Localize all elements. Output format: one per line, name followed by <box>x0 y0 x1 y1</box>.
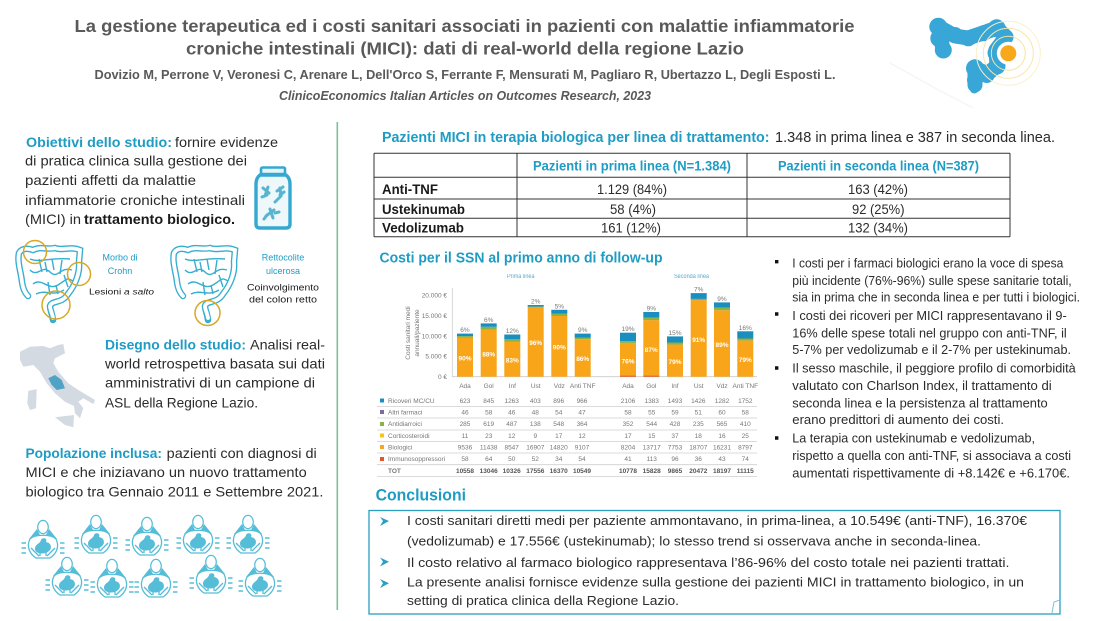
panel: study design: world retrospettiva basata sui dati <box>104 356 325 372</box>
data table: cost breakdown: 565 <box>717 421 728 428</box>
data table: cost breakdown: 7753 <box>668 444 683 452</box>
data table: cost breakdown: 58 <box>485 410 493 416</box>
panel: ulcerative colitis: Coinvolgimento <box>247 283 319 293</box>
authors: Dovizio M, Perrone V, Veronesi C, Arenare L, Dell'Orco S, Ferrante F, Mensurati M, Pagliaro R, Ubertazzo L, Degli Esposti L. <box>94 67 836 82</box>
bar chart: annual costs per patient: 96% <box>529 340 542 347</box>
table: patients by biologic and line: Pazienti in prima linea (N=1.384) <box>533 159 731 174</box>
data table: cost breakdown: 58 <box>461 456 469 463</box>
data table: cost breakdown: 623 <box>460 398 471 405</box>
data table: cost breakdown: 17556 <box>526 468 545 475</box>
data table: cost breakdown: 428 <box>670 421 681 428</box>
panel: study design: amministrativi di un campione di <box>105 374 315 390</box>
data table: cost breakdown: 16 <box>718 433 726 440</box>
data table: cost breakdown: 46 <box>508 410 516 416</box>
icon: intestine with skip lesions <box>18 240 90 320</box>
panel: study design: Analisi real- <box>250 336 325 352</box>
data table: cost breakdown: 352 <box>623 421 634 428</box>
data table: cost breakdown: 13717 <box>643 444 661 452</box>
data table: cost breakdown: Biologici <box>388 444 412 452</box>
heading: patients by treatment line <box>382 130 1055 146</box>
panel: ulcerative colitis: ulcerosa <box>266 266 300 276</box>
data table: cost breakdown: 548 <box>553 421 565 428</box>
panel: included population: MICI e che iniziavano un nuovo trattamento <box>26 464 307 480</box>
bar chart: annual costs per patient: 10.000 € <box>422 333 447 340</box>
table: patients by biologic and line: 92 (25%) <box>852 202 904 217</box>
panel: conclusions: (vedolizumab) e 17.556€ (ustekinumab); lo stesso trend si osservava anche in seconda-linea. <box>407 534 981 549</box>
data table: cost breakdown: Altri farmaci <box>388 410 422 416</box>
data table: cost breakdown: 54 <box>578 456 586 463</box>
panel: study design: Disegno dello studio: <box>105 336 246 352</box>
data table: cost breakdown: 50 <box>508 456 516 463</box>
table: patients by biologic and line: 132 (34%) <box>848 220 908 236</box>
data table: cost breakdown: 41 <box>624 456 632 463</box>
table: patients by biologic and line: Anti-TNF <box>382 182 438 197</box>
data table: cost breakdown: 20472 <box>689 468 708 475</box>
panel: Crohn's disease: Lesioni a salto <box>89 286 154 296</box>
bar chart: annual costs per patient: 9% <box>578 327 588 334</box>
icon: colon with target <box>890 18 1040 108</box>
icon: medicine bottle <box>256 168 290 228</box>
data table: cost breakdown: 2106 <box>621 398 636 405</box>
panel: included population: pazienti con diagnosi di <box>167 445 317 461</box>
table: patients by biologic and line: 161 (12%) <box>601 220 661 236</box>
data table: cost breakdown: 8797 <box>738 444 753 452</box>
text block: key cost findings: Il sesso maschile, il peggiore profilo di comorbidità <box>792 361 1076 376</box>
panel: conclusions: setting di pratica clinica della Regione Lazio. <box>407 593 679 608</box>
bar chart: annual costs per patient: Vdz <box>554 383 565 390</box>
data table: cost breakdown: 48 <box>532 410 539 416</box>
text block: key cost findings: I costi dei ricoveri per MICI rappresentavano il 9- <box>792 308 1067 323</box>
panel: conclusions: La presente analisi fornisce evidenze sulla gestione dei pazienti MICI in trattamento biologico, in un <box>407 575 1024 590</box>
panel: study objectives: pazienti affetti da malattie <box>25 172 196 188</box>
data table: cost breakdown: 113 <box>647 456 657 463</box>
bar chart: annual costs per patient: 7% <box>694 287 704 294</box>
data table: cost breakdown: 403 <box>530 398 541 405</box>
data table: cost breakdown: 138 <box>530 421 541 428</box>
data table: cost breakdown: 15 <box>648 433 656 440</box>
table: patients by biologic and line <box>374 153 1010 237</box>
data table: cost breakdown: 364 <box>577 421 588 428</box>
data table: cost breakdown: 60 <box>718 410 726 416</box>
data table: cost breakdown: 10778 <box>619 468 637 475</box>
bar chart: annual costs per patient: Ust <box>694 383 704 390</box>
bar chart: annual costs per patient: Seconda linea <box>674 274 710 280</box>
title: La gestione terapeutica ed i costi sanitari associati in pazienti con malattie infiammatorie <box>74 16 855 36</box>
title: croniche intestinali (MICI): dati di real-world della regione Lazio <box>186 38 744 58</box>
panel: study objectives: (MICI) in <box>25 211 81 227</box>
data table: cost breakdown: 10549 <box>573 468 591 475</box>
bar chart: annual costs per patient: 0 € <box>438 374 447 381</box>
data table: cost breakdown: 845 <box>483 398 495 405</box>
data table: cost breakdown: 13046 <box>480 468 498 475</box>
bar chart: annual costs per patient: 91% <box>692 337 705 344</box>
bar chart: annual costs per patient: 15.000 € <box>422 313 447 320</box>
text block: key cost findings: sia in prima che in seconda linea e per tutti i biologici. <box>792 290 1080 305</box>
data table: cost breakdown: 235 <box>693 421 704 428</box>
data table: cost breakdown: 1493 <box>668 398 683 405</box>
bar chart: annual costs per patient: 89% <box>715 342 729 349</box>
bar chart: annual costs per patient: Inf <box>509 383 516 390</box>
heading: conclusions: Conclusioni <box>376 486 466 504</box>
text block: key cost findings: rispetto a quella con anti-TNF, si associava a costi <box>792 448 1071 463</box>
data table: cost breakdown: 9865 <box>668 468 683 475</box>
data table: cost breakdown: 25 <box>742 433 749 440</box>
data table: cost breakdown: 544 <box>646 421 658 428</box>
bar chart: annual costs per patient: Anti TNF <box>733 383 758 390</box>
data table: cost breakdown: 15828 <box>643 468 661 475</box>
bar chart: annual costs per patient: 90% <box>553 344 566 352</box>
data table: cost breakdown: 58 <box>742 410 749 416</box>
bar chart: annual costs per patient: 76% <box>621 358 635 366</box>
data table: cost breakdown: 8204 <box>621 444 636 452</box>
bar chart: annual costs per patient: 15% <box>668 330 682 337</box>
data table: cost breakdown: 46 <box>461 410 469 416</box>
title <box>74 16 855 58</box>
bar chart: annual costs per patient: Inf <box>671 383 679 390</box>
text block: key cost findings: seconda linea e la persistenza al trattamento <box>792 395 1048 410</box>
data table: cost breakdown: 11 <box>462 433 469 440</box>
panel: study design: ASL della Regione Lazio. <box>105 394 258 410</box>
panel: study objectives <box>25 134 278 227</box>
bar chart: annual costs per patient: 6% <box>460 327 470 334</box>
data table: cost breakdown: 10326 <box>503 468 521 475</box>
panel: Crohn's disease <box>18 240 154 320</box>
heading: SSN costs: Costi per il SSN al primo anno di follow-up <box>380 250 663 266</box>
panel: conclusions: I costi sanitari diretti medi per paziente ammontavano, in prima-linea, a 10.549€ (anti-TNF), 16.370€ <box>407 513 1028 528</box>
bar chart: annual costs per patient: 2% <box>531 298 541 306</box>
bar chart: annual costs per patient: 83% <box>506 358 519 364</box>
bar chart: annual costs per patient: 6% <box>484 317 494 324</box>
panel: study objectives: Obiettivi dello studio: <box>26 134 172 150</box>
data table: cost breakdown: 59 <box>671 410 679 416</box>
data table: cost breakdown: 966 <box>577 398 588 405</box>
panel: ulcerative colitis: del colon retto <box>249 295 317 305</box>
text block: key cost findings: più incidente (76%-96%) sulle spese sanitarie totali, <box>792 273 1072 288</box>
data table: cost breakdown: 487 <box>506 421 518 428</box>
data table: cost breakdown: 18 <box>695 433 702 440</box>
data table: cost breakdown: 1263 <box>504 398 519 405</box>
data table: cost breakdown: 14820 <box>550 444 568 452</box>
table: patients by biologic and line: 163 (42%) <box>848 182 908 197</box>
text block: key cost findings: aumentati rispettivamente di +8.142€ e +6.170€. <box>792 465 1070 480</box>
data table: cost breakdown: 17 <box>555 433 563 440</box>
bar chart: annual costs per patient: 79% <box>739 357 752 364</box>
data table: cost breakdown: 9 <box>533 433 537 440</box>
panel: included population <box>26 445 324 500</box>
data table: cost breakdown: 34 <box>555 456 563 463</box>
panel: conclusions: Il costo relativo al farmaco biologico rappresentava l’86-96% del costo totale nei pazienti trattati. <box>407 555 1010 570</box>
data table: cost breakdown: TOT <box>388 468 401 475</box>
data table: cost breakdown: 410 <box>740 421 751 428</box>
panel: Crohn's disease: Crohn <box>108 266 132 276</box>
data table: cost breakdown: 12 <box>578 433 586 440</box>
heading: patients by treatment line: 1.348 in prima linea e 387 in seconda linea. <box>775 130 1055 146</box>
data table: cost breakdown: 52 <box>532 456 539 463</box>
bar chart: annual costs per patient: 79% <box>668 359 682 366</box>
bar chart: annual costs per patient: 9% <box>717 296 727 303</box>
data table: cost breakdown: 11115 <box>737 468 754 475</box>
data table: cost breakdown: 23 <box>485 433 493 440</box>
data table: cost breakdown: 43 <box>718 456 726 463</box>
icon: map of Italy with Lazio <box>20 344 95 427</box>
data table: cost breakdown: 18707 <box>689 444 708 452</box>
bar chart: annual costs per patient: Ust <box>531 383 541 390</box>
bar chart: annual costs per patient: Gol <box>484 383 494 390</box>
bar chart: annual costs per patient <box>405 274 758 390</box>
data table: cost breakdown: Immunosoppressori <box>388 456 445 463</box>
data table: cost breakdown: 36 <box>695 456 702 463</box>
text block: key cost findings <box>775 255 1080 480</box>
panel: ulcerative colitis: Rettocolite <box>262 253 304 263</box>
data table: cost breakdown: 12 <box>508 433 516 440</box>
bar chart: annual costs per patient: Ada <box>622 383 634 390</box>
panel: study design <box>104 336 325 410</box>
table: patients by biologic and line: 1.129 (84%) <box>597 182 667 197</box>
data table: cost breakdown: 1426 <box>691 398 706 405</box>
bar chart: annual costs per patient: Vdz <box>716 383 728 390</box>
table: patients by biologic and line: Vedolizumab <box>382 220 464 236</box>
panel: study objectives: infiammatorie croniche intestinali <box>25 192 245 208</box>
data table: cost breakdown: 10558 <box>456 468 474 475</box>
data table: cost breakdown: 16907 <box>526 444 545 452</box>
text block: key cost findings: valutato con Charlson Index, il trattamento di <box>792 378 1052 393</box>
bar chart: annual costs per patient: 9% <box>647 306 656 312</box>
data table: cost breakdown: 74 <box>742 456 749 463</box>
panel: ulcerative colitis <box>173 248 319 326</box>
heading: patients by treatment line: Pazienti MICI in terapia biologica per linea di trattamento: <box>382 130 770 146</box>
panel: included population: biologico tra Gennaio 2011 e Settembre 2021. <box>26 484 324 500</box>
bar chart: annual costs per patient: 16% <box>739 325 752 332</box>
panel: study objectives: trattamento biologico. <box>84 211 235 227</box>
data table: cost breakdown: 51 <box>695 410 702 416</box>
divider: vertical green line <box>336 122 338 610</box>
header <box>74 16 855 103</box>
icon group: patients <box>22 515 282 597</box>
data table: cost breakdown: 16231 <box>713 444 731 452</box>
data table: cost breakdown: 1383 <box>644 398 659 405</box>
table: patients by biologic and line: Ustekinumab <box>382 202 465 217</box>
data table: cost breakdown <box>377 398 757 476</box>
data table: cost breakdown: 896 <box>553 398 565 405</box>
text block: key cost findings: I costi per i farmaci biologici erano la voce di spesa <box>792 255 1064 270</box>
data table: cost breakdown: 18197 <box>713 468 731 475</box>
data table: cost breakdown: 9107 <box>575 444 590 452</box>
bar chart: annual costs per patient: 19% <box>621 326 635 333</box>
text block: key cost findings: erano predittori di aumento dei costi. <box>792 412 1004 427</box>
data table: cost breakdown: 64 <box>485 456 493 463</box>
data table: cost breakdown: Corticosteroidi <box>388 433 430 440</box>
data table: cost breakdown: Antidiarroici <box>388 421 422 428</box>
text block: key cost findings: 16% delle spese totali nel gruppo con anti-TNF, il <box>792 325 1067 340</box>
data table: cost breakdown: 9536 <box>458 444 473 452</box>
table: patients by biologic and line: Pazienti in seconda linea (N=387) <box>778 159 979 174</box>
data table: cost breakdown: 1752 <box>738 398 753 405</box>
bar chart: annual costs per patient: Gol <box>646 383 657 390</box>
table: patients by biologic and line: 58 (4%) <box>610 202 656 217</box>
panel: included population: Popolazione inclusa: <box>26 445 162 461</box>
data table: cost breakdown: 37 <box>671 433 679 440</box>
icon: intestine with rectal involvement <box>173 248 235 326</box>
bar chart: annual costs per patient: 87% <box>645 347 658 354</box>
panel: conclusions <box>369 510 1060 614</box>
bar chart: annual costs per patient: 88% <box>482 352 495 358</box>
bar chart: annual costs per patient: 5.000 € <box>425 354 447 361</box>
data table: cost breakdown: 54 <box>555 410 563 416</box>
data table: cost breakdown: 16370 <box>550 468 568 475</box>
panel: study objectives: fornire evidenze <box>175 134 278 150</box>
data table: cost breakdown: 47 <box>578 410 586 416</box>
bar chart: annual costs per patient: Anti TNF <box>570 383 595 390</box>
bar chart: annual costs per patient: Ada <box>459 383 471 390</box>
data table: cost breakdown: 11438 <box>480 444 498 452</box>
text block: key cost findings: 5-7% per vedolizumab e il 2-7% per ustekinumab. <box>792 342 1071 357</box>
data table: cost breakdown: 8547 <box>504 444 519 452</box>
data table: cost breakdown: 285 <box>460 421 471 428</box>
journal reference: ClinicoEconomics Italian Articles on Outcomes Research, 2023 <box>279 89 651 103</box>
bar chart: annual costs per patient: 20.000 € <box>422 292 447 299</box>
data table: cost breakdown: 58 <box>624 410 632 416</box>
text block: key cost findings: La terapia con ustekinumab e vedolizumab, <box>792 431 1035 446</box>
bar chart: annual costs per patient: Prima linea <box>507 274 535 280</box>
bar chart: annual costs per patient: annuali/paziente <box>414 309 421 357</box>
data table: cost breakdown: 1282 <box>715 398 730 405</box>
bar chart: annual costs per patient: Costi sanitari medi <box>405 306 412 360</box>
bar chart: annual costs per patient: 12% <box>506 328 519 335</box>
panel: study objectives: di pratica clinica sulla gestione dei <box>25 152 247 168</box>
data table: cost breakdown: Ricoveri MC/CU <box>388 398 435 405</box>
panel: Crohn's disease: Morbo di <box>102 253 138 263</box>
bar chart: annual costs per patient: 86% <box>576 356 589 363</box>
data table: cost breakdown: 17 <box>624 433 632 440</box>
data table: cost breakdown: 96 <box>671 456 679 463</box>
bar chart: annual costs per patient: 5% <box>555 303 564 310</box>
bar chart: annual costs per patient: 90% <box>458 356 472 362</box>
data table: cost breakdown: 619 <box>483 421 495 428</box>
data table: cost breakdown: 55 <box>648 410 656 416</box>
